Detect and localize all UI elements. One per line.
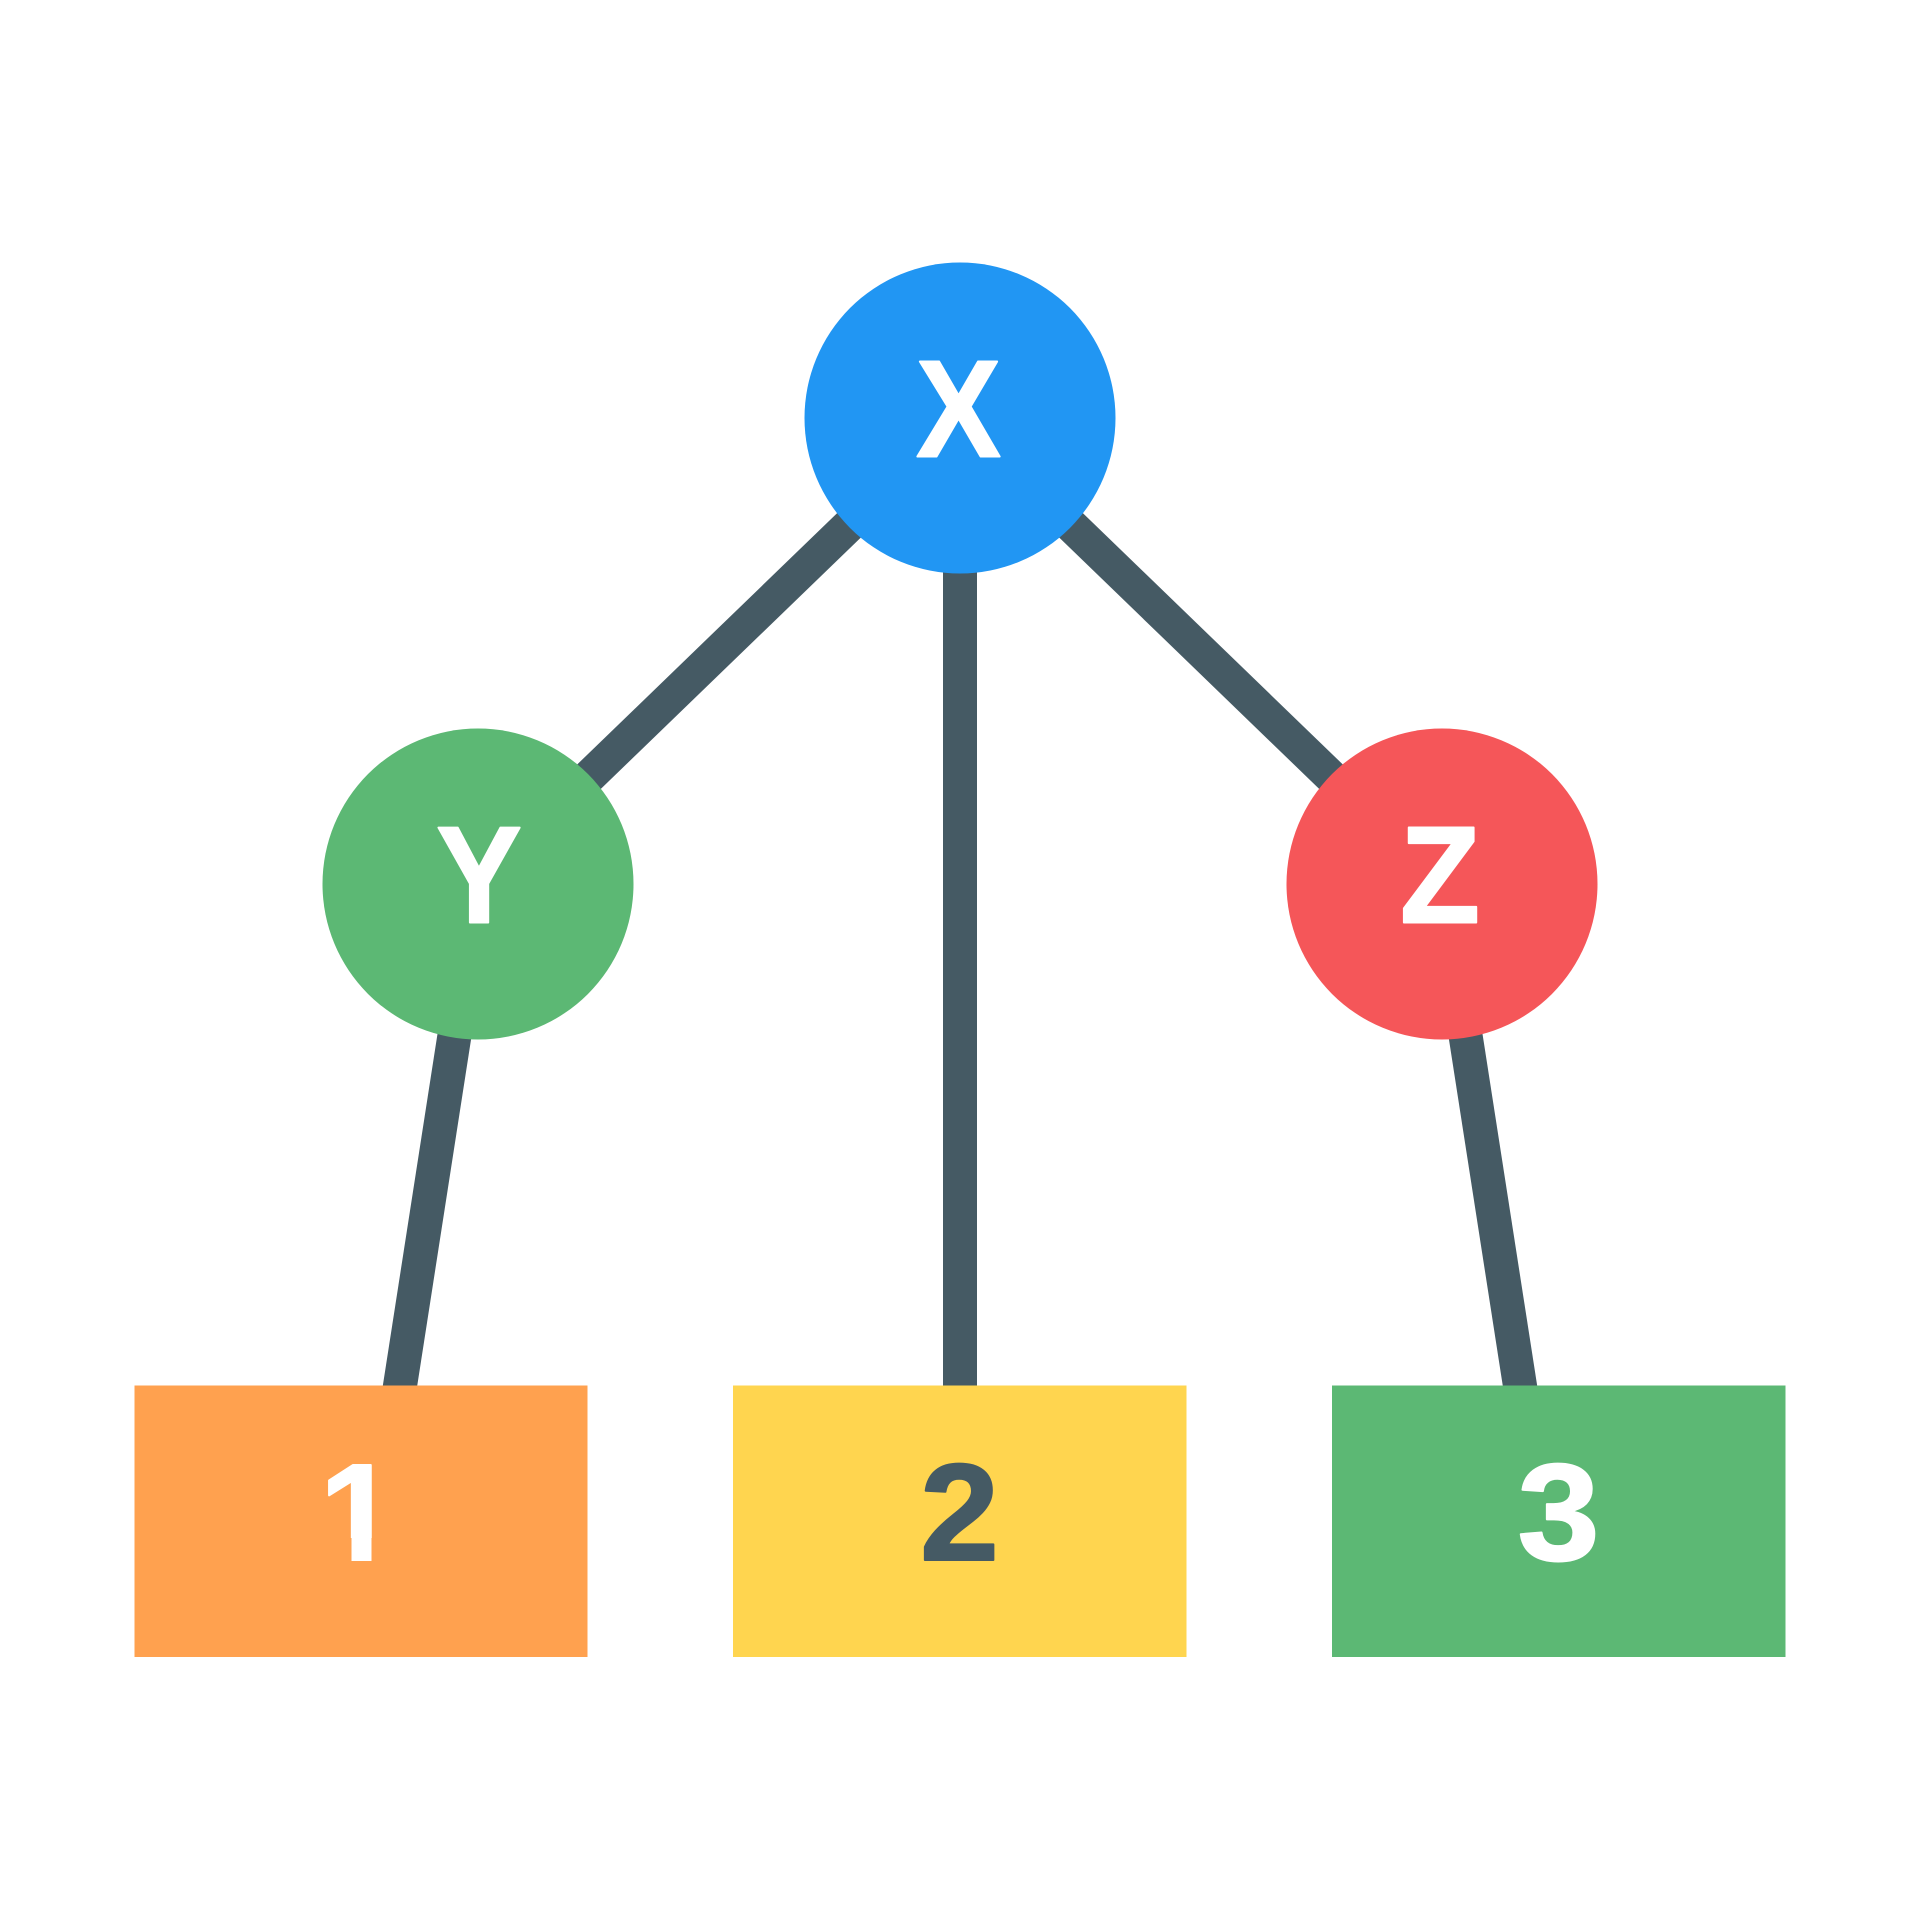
node Z: Z bbox=[1400, 797, 1480, 952]
box 2: 2 bbox=[920, 1435, 999, 1590]
connector: X to Y bbox=[478, 418, 960, 884]
node Y bbox=[322, 728, 634, 1040]
box 1: 1 bbox=[320, 1436, 396, 1590]
tree diagram bbox=[134, 262, 1786, 1657]
box 2 bbox=[733, 1386, 1186, 1657]
connector: Z to 3 bbox=[1442, 884, 1522, 1400]
connector: X to 2 bbox=[943, 418, 977, 1400]
box 3 bbox=[1332, 1386, 1786, 1657]
box 3: 3 bbox=[1517, 1436, 1600, 1590]
node Y: Y bbox=[436, 798, 522, 953]
node X bbox=[804, 262, 1116, 574]
node Z bbox=[1286, 728, 1598, 1040]
connector: X to Z bbox=[960, 418, 1442, 884]
box 1 bbox=[134, 1386, 588, 1657]
connector: Y to 1 bbox=[398, 884, 478, 1400]
connectors bbox=[398, 418, 1522, 1400]
node X: X bbox=[916, 333, 1001, 487]
